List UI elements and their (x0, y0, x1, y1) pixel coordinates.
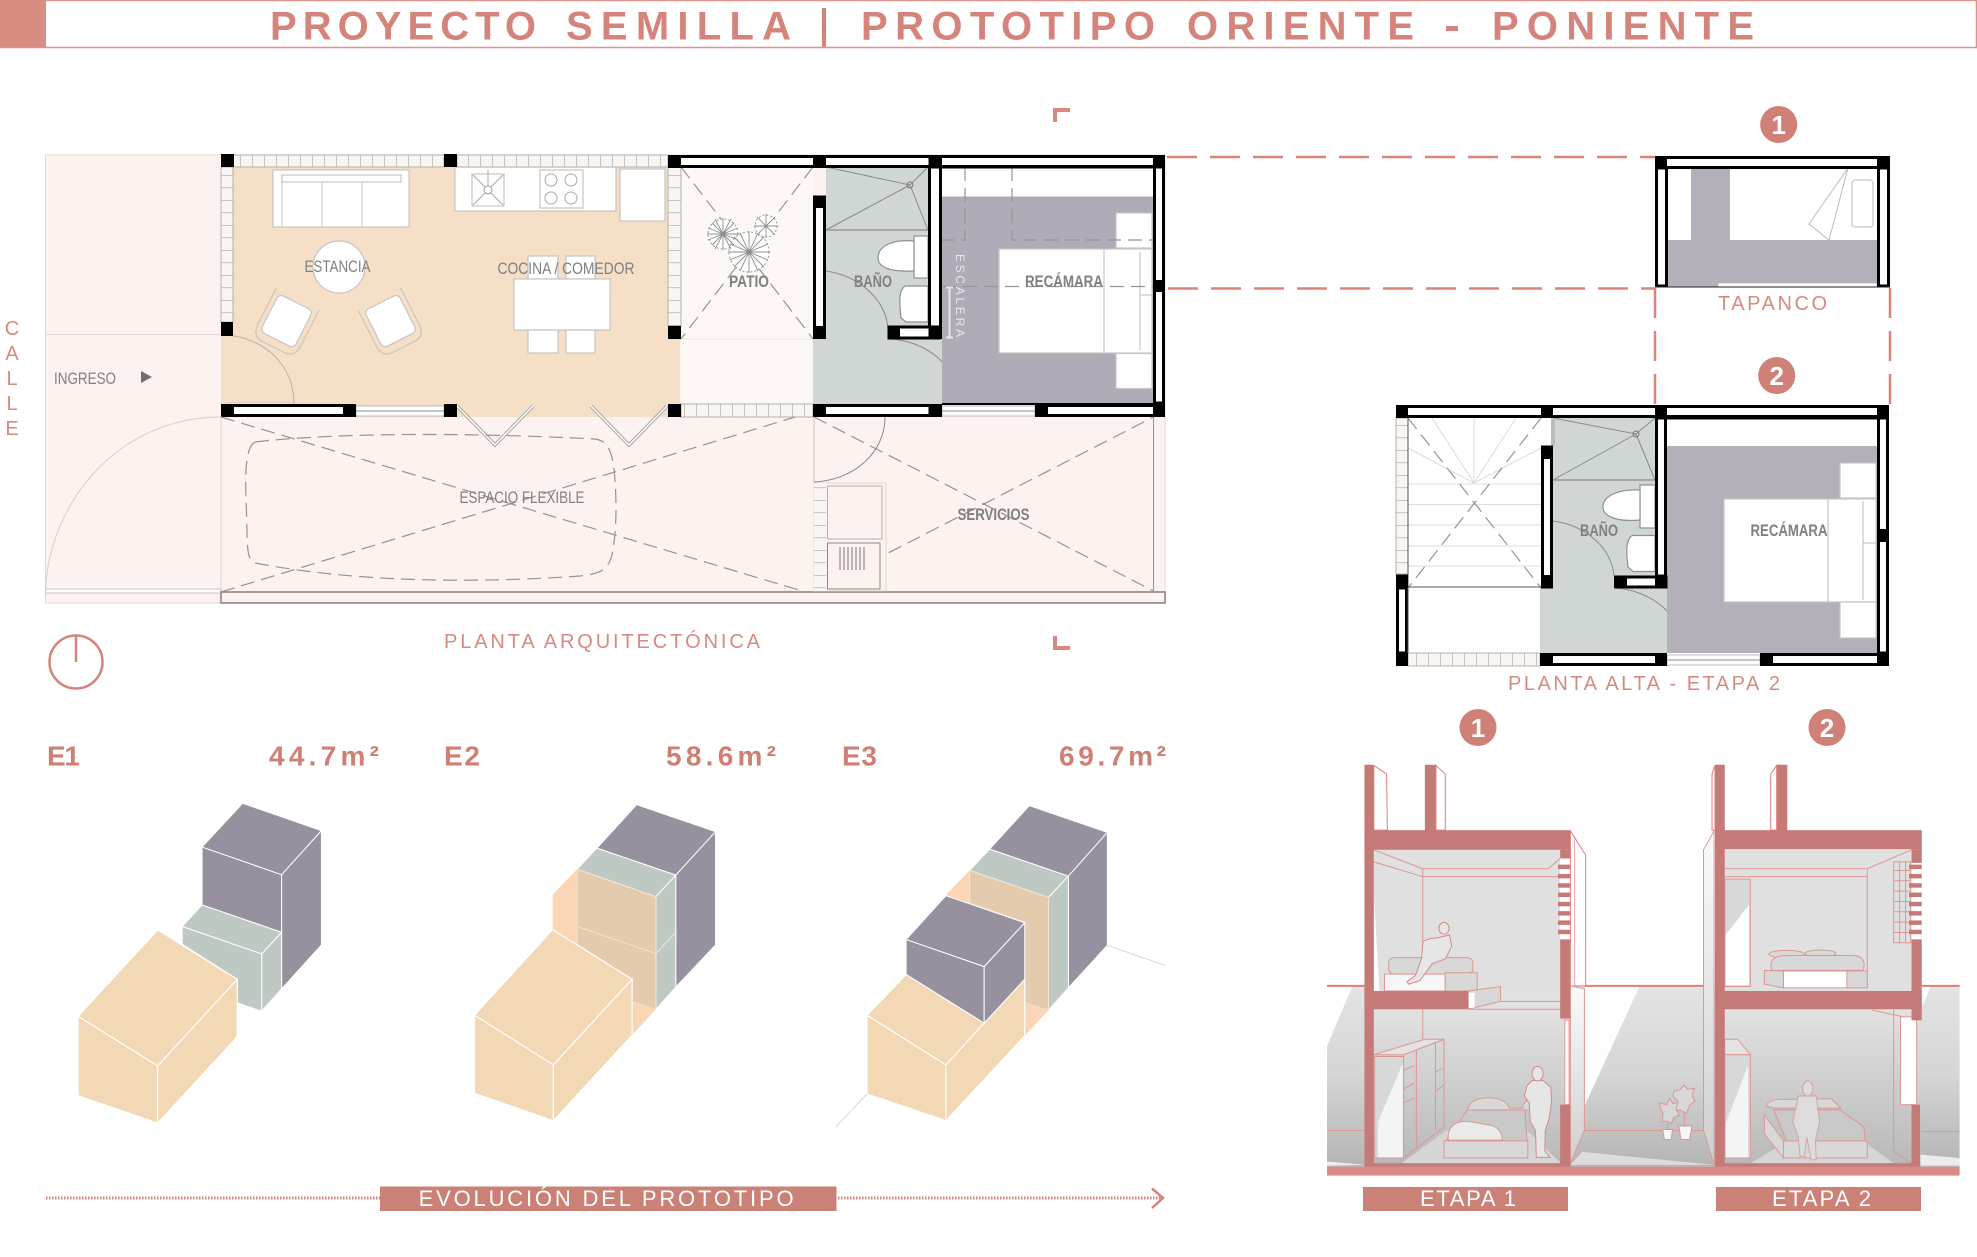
armchair right (358, 288, 425, 358)
room: recamara (942, 167, 1153, 404)
toilet (1603, 485, 1655, 528)
number badge 1 top (1760, 106, 1797, 143)
exterior dashed spaces (221, 417, 1154, 592)
projection dashed lines (1167, 157, 1890, 405)
stage heading E3: 69.7m² (1059, 740, 1166, 772)
header bar (0, 0, 1976, 48)
concrete structure (1715, 765, 1922, 1167)
side label: calle: L (6, 368, 18, 390)
crop mark top (1055, 110, 1070, 122)
volume E2 (474, 805, 716, 1121)
title: PROYECTO (270, 4, 536, 48)
plants (1660, 1085, 1695, 1139)
wardrobe (1725, 879, 1750, 987)
windows and walls (221, 154, 1165, 445)
room labels ground floor: PATIO (729, 273, 769, 291)
kitchen counter (455, 167, 616, 211)
sofa (273, 170, 409, 227)
upper room (1374, 850, 1560, 1009)
parapet sides (1374, 765, 1445, 830)
loft door symbol (1809, 168, 1848, 240)
number badge 1 section: 1 (1471, 713, 1485, 743)
stage heading E1: 44.7m² (269, 740, 379, 772)
upper floor plan (1396, 405, 1889, 666)
door swing (226, 335, 294, 404)
evolution arrow (46, 1186, 1163, 1211)
dining table (514, 256, 610, 353)
door swings (826, 271, 959, 404)
lattice (1894, 862, 1911, 943)
caption: tapanco: TAPANCO (1718, 293, 1827, 315)
banner etapa 1 (1363, 1186, 1568, 1211)
room labels ground floor: BAÑO (854, 271, 892, 291)
bed (999, 249, 1152, 353)
armchair left (252, 288, 319, 358)
bed (1444, 1098, 1535, 1158)
isometric volumes (78, 803, 1166, 1127)
room labels ground floor: ESTANCIA (304, 258, 370, 276)
stage heading E2: 58.6m² (666, 740, 776, 772)
banner etapa 2: ETAPA 2 (1772, 1186, 1871, 1211)
stair label: ESCALERA (953, 254, 967, 337)
room labels ground floor: INGRESO (54, 370, 116, 388)
round table (313, 241, 365, 293)
entry arrow (141, 371, 152, 383)
standing person (1524, 1066, 1552, 1157)
room labels ground floor: COCINA / COMEDOR (498, 260, 635, 278)
upper windows and walls (1396, 405, 1889, 666)
mezzanine bed (1384, 958, 1501, 1009)
caption: planta arquitectonica: PLANTA ARQUITECTÓNICA (444, 630, 761, 653)
crop mark bottom (1055, 636, 1070, 648)
lower room (1725, 1009, 1917, 1163)
room: estancia cocina comedor (221, 167, 680, 417)
stage heading E2: E2 (444, 740, 480, 772)
concrete structure (1364, 765, 1570, 1167)
upper bano (1540, 418, 1684, 653)
fridge (620, 169, 665, 221)
number badge 2 top: 2 (1769, 361, 1784, 391)
banner etapa 2 (1716, 1186, 1921, 1211)
lower room (1374, 1009, 1569, 1163)
wardrobe (1374, 1039, 1444, 1158)
title: PROTOTIPO (861, 4, 1155, 48)
room: patio (681, 167, 813, 404)
window (1565, 1020, 1569, 1105)
section stage 1 (1364, 765, 1586, 1167)
seated person (1407, 922, 1452, 984)
upper room (1725, 849, 1912, 991)
volume E1 (78, 803, 321, 1123)
upper recamara (1667, 446, 1877, 653)
parapet sides (1712, 765, 1777, 830)
building section (1327, 765, 1960, 1176)
side label: calle: C (5, 318, 19, 340)
number badge 1 section (1460, 709, 1496, 746)
section stage 2 (1704, 765, 1922, 1167)
title: ORIENTE (1187, 4, 1414, 48)
upper floor labels: BAÑO (1580, 520, 1618, 540)
number badge 2 section (1808, 709, 1846, 746)
laundry area (814, 483, 886, 591)
bed (1764, 1099, 1867, 1158)
stair symbol (946, 288, 953, 338)
plants (707, 214, 778, 273)
room labels ground floor: ESPACIO FLEXIBLE (460, 489, 584, 507)
room labels ground floor (54, 258, 1103, 524)
upper floor labels (1580, 520, 1828, 540)
title (270, 4, 1754, 48)
volume E3 (836, 806, 1166, 1127)
loft bench (1852, 180, 1873, 227)
evolution banner: EVOLUCIÓN DEL PROTOTIPO (419, 1186, 794, 1211)
side label: calle: L (6, 393, 18, 415)
stage heading E3 (842, 740, 1166, 772)
number badge 2 top (1758, 357, 1795, 394)
number badge 1 top: 1 (1771, 110, 1786, 140)
background wall and ground (1327, 986, 1960, 1167)
nightstands (1116, 213, 1152, 248)
title: SEMILLA (566, 4, 791, 48)
wardrobe (1725, 1039, 1750, 1158)
toilet (878, 236, 928, 278)
room labels ground floor: SERVICIOS (958, 506, 1030, 524)
title: PONIENTE (1492, 4, 1754, 48)
banner etapa 1: ETAPA 1 (1420, 1186, 1516, 1211)
north symbol (50, 636, 102, 688)
side label: calle: A (5, 343, 19, 365)
left exterior side (1704, 831, 1714, 1165)
upper floor labels: RECÁMARA (1750, 521, 1828, 540)
number badge 2 section: 2 (1820, 713, 1834, 743)
bed (1764, 950, 1867, 988)
sink (1627, 536, 1655, 572)
nightstand (1840, 463, 1876, 498)
tapanco plan (1655, 156, 1890, 287)
nightstand (1116, 354, 1152, 388)
room: bano (813, 167, 959, 404)
side label: calle (5, 318, 19, 440)
ground slab (1327, 1167, 1960, 1176)
ground floor plan (46, 154, 1165, 603)
seated person (1793, 1081, 1820, 1160)
stage heading E2 (444, 740, 776, 772)
stair well (1408, 418, 1541, 588)
side label: calle: E (5, 418, 19, 440)
stage heading E1 (47, 740, 379, 772)
stage heading E3: E3 (842, 740, 877, 772)
caption: planta alta: PLANTA ALTA - ETAPA 2 (1508, 673, 1780, 695)
stage heading E1: E1 (47, 740, 80, 772)
exterior side (1570, 831, 1586, 986)
bed (1724, 499, 1876, 602)
nightstand (1840, 602, 1876, 638)
sink (900, 286, 928, 322)
room labels ground floor: RECÁMARA (1025, 272, 1103, 291)
